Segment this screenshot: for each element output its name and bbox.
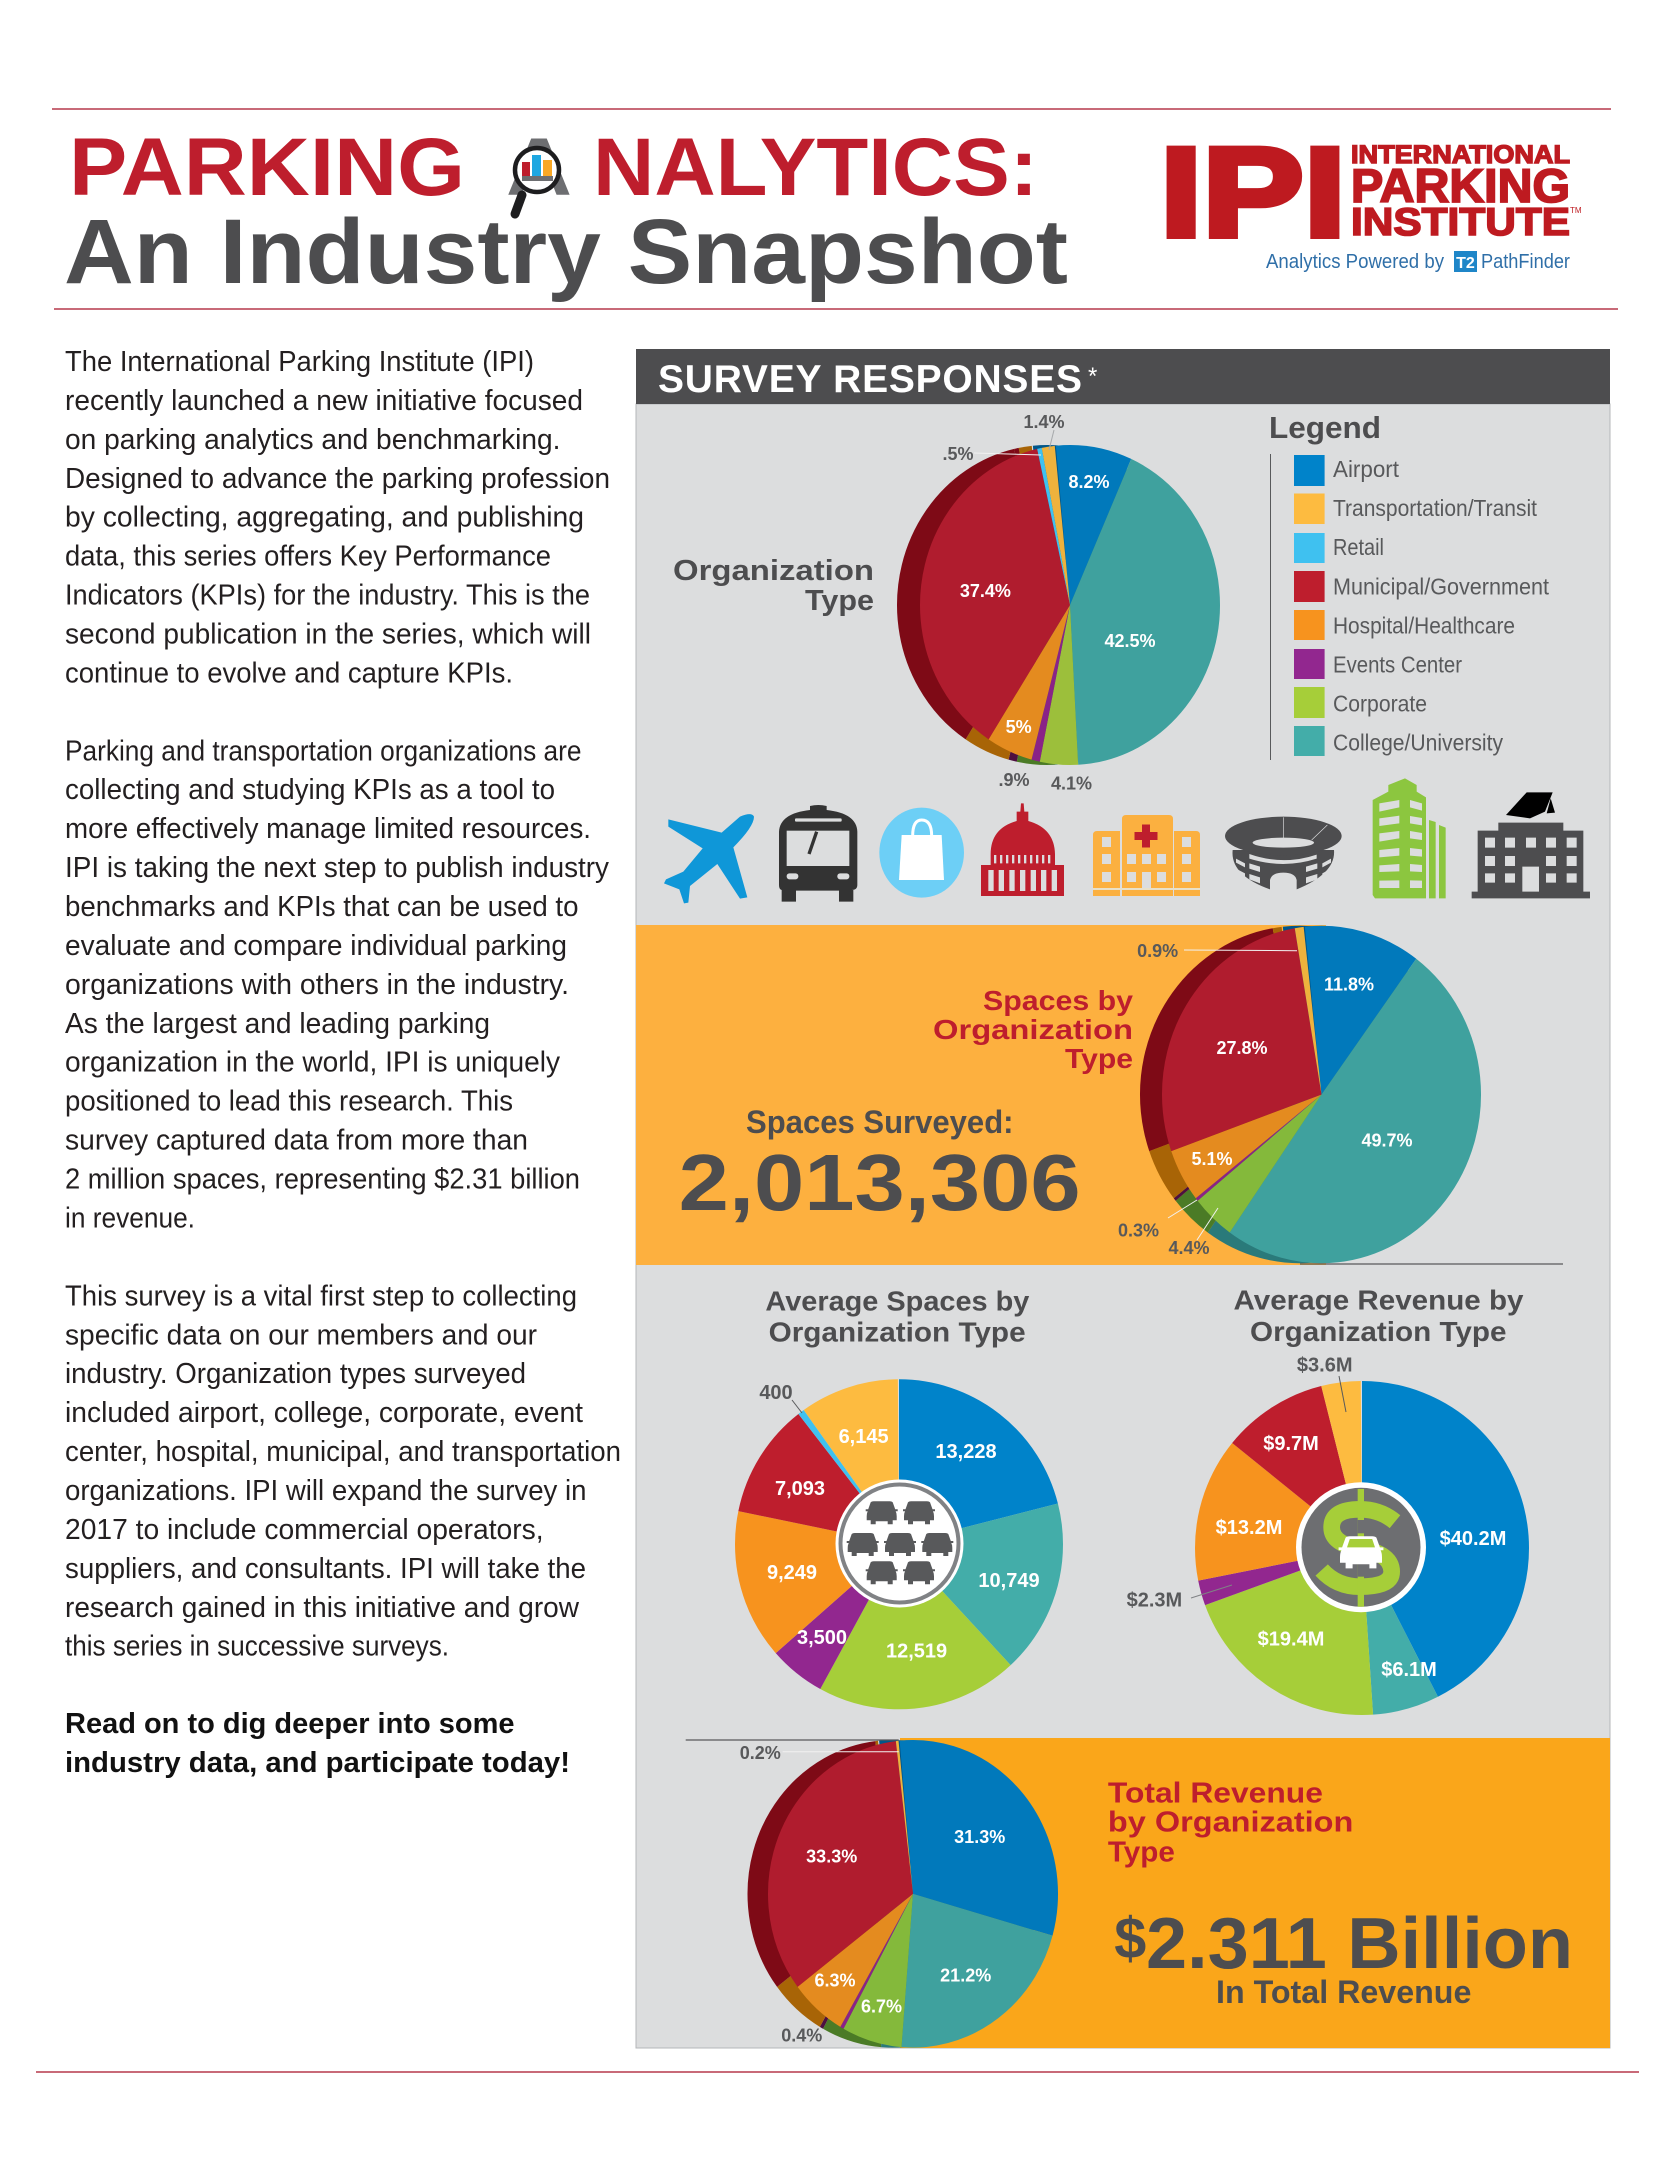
panel heading: survey responses: SURVEY RESPONSES: [658, 358, 1082, 401]
logo: IPI: T2: [1456, 255, 1475, 272]
pie chart: organization type: 1.4%: [1023, 412, 1065, 432]
call to action: [65, 1708, 570, 1779]
logo: IPI: INSTITUTE: [1351, 201, 1570, 244]
intro paragraph two: in revenue.: [65, 1202, 195, 1234]
donut chart: average spaces: 9,249: [767, 1562, 817, 1584]
heading: average revenue by organization type: Organization Type: [1250, 1316, 1506, 1347]
pie chart: organization type: 4.1%: [1051, 774, 1092, 794]
pie chart: organization type: 8.2%: [1068, 472, 1110, 492]
legend: Retail: [1333, 534, 1384, 560]
legend: Transportation/Transit: [1333, 495, 1538, 521]
call to action: industry data, and participate today!: [65, 1747, 570, 1779]
icon: stadium: [1225, 817, 1342, 889]
call to action: Read on to dig deeper into some: [65, 1708, 514, 1740]
icon: shopping bag: [879, 808, 964, 898]
intro paragraph one: Designed to advance the parking profession: [65, 463, 610, 495]
stat: total revenue: [1114, 1904, 1573, 2010]
intro paragraph three: [65, 1280, 621, 1663]
pie chart: organization type: 37.4%: [960, 581, 1011, 601]
donut chart: average spaces: 7,093: [775, 1478, 825, 1500]
legend: Municipal/Government: [1333, 574, 1550, 600]
heading: total revenue by organization type: Total Revenue: [1108, 1777, 1323, 1809]
donut chart: average spaces: 6,145: [839, 1426, 889, 1448]
heading: spaces by organization type: Spaces by: [983, 985, 1133, 1016]
legend: Events Center: [1333, 652, 1462, 678]
pie chart: spaces by organization type: 27.8%: [1216, 1038, 1268, 1058]
panel heading: survey responses: *: [1088, 363, 1097, 390]
icon: capitol: [981, 803, 1064, 896]
heading: spaces by organization type: Type: [1065, 1043, 1133, 1074]
pie chart: total revenue by organization type: 6.3%: [814, 1971, 856, 1991]
donut chart: average revenue: $9.7M: [1263, 1433, 1319, 1455]
donut chart: average spaces: [759, 1382, 1040, 1663]
intro paragraph three: included airport, college, corporate, event: [65, 1397, 583, 1429]
legend: [1269, 410, 1550, 760]
pie chart: total revenue by organization type: 33.3%: [806, 1847, 857, 1867]
intro paragraph two: survey captured data from more than: [65, 1125, 528, 1157]
donut chart: average revenue: $40.2M: [1440, 1528, 1506, 1550]
heading: organization type: Organization: [673, 555, 874, 587]
pie chart: organization type: 42.5%: [1104, 631, 1156, 651]
heading: spaces by organization type: [933, 985, 1133, 1074]
heading: average spaces by organization type: Average Spaces by: [765, 1286, 1030, 1317]
stat: spaces surveyed: 2,013,306: [679, 1138, 1081, 1227]
legend: Legend: [1269, 410, 1381, 445]
intro paragraph three: 2017 to include commercial operators,: [65, 1514, 544, 1546]
stat: spaces surveyed: [679, 1104, 1081, 1227]
intro paragraph two: organization in the world, IPI is uniquely: [65, 1047, 560, 1079]
heading: average spaces by organization type: Organization Type: [769, 1317, 1026, 1348]
stat: total revenue: In Total Revenue: [1216, 1974, 1471, 2010]
intro paragraph three: This survey is a vital first step to collecting: [65, 1280, 577, 1312]
donut chart: average revenue: $2.3M: [1127, 1590, 1182, 1612]
intro paragraph three: research gained in this initiative and grow: [65, 1592, 580, 1624]
icon: magnifying glass with bars: [515, 148, 559, 214]
pie chart: total revenue by organization type: 31.3%: [954, 1827, 1005, 1847]
intro paragraph one: on parking analytics and benchmarking.: [65, 424, 560, 456]
title word NALYTICS: NALYTICS:: [593, 122, 1038, 213]
panel heading: survey responses: [636, 349, 1610, 404]
logo: IPI: INTERNATIONAL: [1351, 141, 1570, 169]
intro paragraph one: Indicators (KPIs) for the industry. This is the: [65, 580, 590, 612]
donut chart: average spaces: 13,228: [935, 1441, 997, 1463]
intro paragraph three: suppliers, and consultants. IPI will take the: [65, 1553, 586, 1585]
intro paragraph two: Parking and transportation organizations are: [65, 735, 582, 767]
heading: total revenue by organization type: by Organization: [1108, 1807, 1353, 1839]
intro paragraph three: industry. Organization types surveyed: [65, 1358, 526, 1390]
pie chart: total revenue by organization type: 21.2%: [940, 1966, 991, 1986]
intro paragraph one: [65, 346, 610, 689]
icon: college building: [1472, 792, 1590, 898]
donut chart: average spaces: 12,519: [886, 1641, 947, 1663]
logo: IPI: IPI: [1160, 121, 1346, 263]
pie chart: organization type: [942, 412, 1156, 794]
legend: Airport: [1333, 456, 1400, 482]
pie chart: spaces by organization type: 4.4%: [1168, 1238, 1210, 1258]
pie chart: spaces by organization type: 5.1%: [1191, 1149, 1233, 1169]
pie chart: spaces by organization type: 11.8%: [1324, 975, 1374, 995]
heading: average revenue by organization type: Average Revenue by: [1234, 1284, 1524, 1316]
icon: hospital: [1093, 815, 1200, 896]
panel: survey responses background: [636, 404, 1610, 2048]
intro paragraph two: 2 million spaces, representing $2.31 billion: [65, 1164, 580, 1196]
pie chart: total revenue by organization type: 0.2%: [740, 1743, 781, 1763]
pie chart: total revenue by organization type: 0.4%: [781, 2026, 822, 2046]
stat: total revenue: $: [1114, 1906, 1146, 1971]
pie chart: total revenue by organization type: 6.7%: [861, 1997, 902, 2017]
intro paragraph two: evaluate and compare individual parking: [65, 930, 567, 962]
heading: total revenue by organization type: [1108, 1777, 1353, 1869]
intro paragraph two: more effectively manage limited resources.: [65, 813, 591, 845]
intro paragraph two: organizations with others in the industry.: [65, 969, 569, 1001]
pie chart: spaces by organization type: 0.9%: [1137, 941, 1178, 961]
logo: IPI: PARKING: [1351, 159, 1570, 212]
icon: office building: [1373, 778, 1446, 898]
stat: spaces surveyed: Spaces Surveyed:: [746, 1104, 1014, 1140]
heading: total revenue by organization type: Type: [1108, 1837, 1175, 1869]
donut chart: average revenue: [1127, 1355, 1506, 1681]
donut chart: average revenue: $6.1M: [1381, 1659, 1437, 1681]
legend: Hospital/Healthcare: [1333, 612, 1515, 638]
donut chart: average revenue: $19.4M: [1258, 1629, 1324, 1651]
legend: Corporate: [1333, 690, 1427, 716]
pie chart: total revenue by organization type: [686, 1740, 1005, 2046]
icon: airplane: [664, 814, 754, 903]
intro paragraph three: specific data on our members and our: [65, 1319, 537, 1351]
icon: parking lot of cars: [836, 1480, 964, 1608]
heading: organization type: [673, 555, 874, 617]
intro paragraph two: collecting and studying KPIs as a tool to: [65, 774, 555, 806]
title line one: PARKING: [69, 122, 465, 213]
heading: average spaces by organization type: [765, 1286, 1030, 1348]
intro paragraph two: IPI is taking the next step to publish industry: [65, 852, 609, 884]
pie chart: spaces by organization type: 49.7%: [1361, 1131, 1413, 1151]
heading: organization type: Type: [805, 585, 874, 617]
donut chart: average spaces: 10,749: [978, 1570, 1040, 1592]
donut chart: average spaces: 400: [759, 1382, 793, 1404]
intro paragraph one: by collecting, aggregating, and publishing: [65, 502, 584, 534]
donut chart: average revenue: $3.6M: [1297, 1355, 1352, 1377]
logo: IPI: TM: [1570, 206, 1582, 215]
intro paragraph one: recently launched a new initiative focused: [65, 385, 583, 417]
icon: bus: [779, 805, 857, 902]
intro paragraph one: continue to evolve and capture KPIs.: [65, 657, 513, 689]
panel: spaces surveyed band: [636, 925, 1326, 1265]
legend: College/University: [1333, 730, 1503, 756]
pie chart: organization type: .9%: [998, 770, 1030, 790]
powered by line: Analytics Powered by: [1266, 251, 1444, 273]
intro paragraph two: benchmarks and KPIs that can be used to: [65, 891, 578, 923]
donut chart: average revenue: $13.2M: [1216, 1517, 1282, 1539]
intro paragraph one: second publication in the series, which will: [65, 618, 591, 650]
pie chart: organization type: 5%: [1006, 717, 1032, 737]
logo: IPI: [1160, 121, 1582, 273]
title: [64, 122, 1068, 303]
pie chart: organization type: .5%: [942, 444, 974, 464]
intro paragraph one: The International Parking Institute (IPI): [65, 346, 534, 378]
intro paragraph three: this series in successive surveys.: [65, 1631, 449, 1663]
panel: total revenue band: [900, 1738, 1610, 2048]
logo: IPI: PathFinder: [1481, 251, 1570, 273]
icon: dollar sign with car: [1296, 1482, 1426, 1612]
intro paragraph two: positioned to lead this research. This: [65, 1086, 513, 1118]
intro paragraph two: [65, 735, 609, 1234]
intro paragraph three: center, hospital, municipal, and transportation: [65, 1436, 621, 1468]
title letter A: A: [506, 122, 572, 213]
donut chart: average spaces: 3,500: [797, 1627, 847, 1649]
subtitle: An Industry Snapshot: [64, 201, 1068, 303]
intro paragraph three: organizations. IPI will expand the survey in: [65, 1475, 586, 1507]
pie chart: spaces by organization type: [1118, 941, 1413, 1258]
stat: total revenue: 2.311 Billion: [1146, 1904, 1573, 1984]
intro paragraph one: data, this series offers Key Performance: [65, 541, 551, 573]
intro paragraph two: As the largest and leading parking: [65, 1008, 490, 1040]
heading: spaces by organization type: Organization: [933, 1014, 1133, 1045]
pie chart: spaces by organization type: 0.3%: [1118, 1221, 1159, 1241]
heading: average revenue by organization type: [1234, 1284, 1524, 1347]
